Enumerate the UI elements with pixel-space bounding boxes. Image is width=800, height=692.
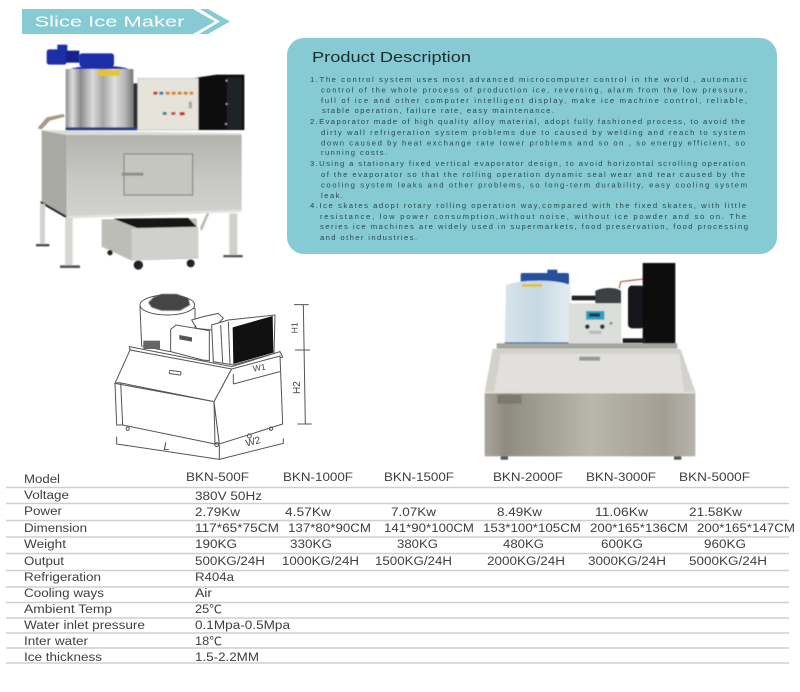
row: Ambient Temp: Ambient Temp <box>24 604 112 616</box>
row: Ice thickness: 1.5-2.2MM <box>195 652 259 664</box>
row: Cooling ways: Cooling ways <box>24 588 104 600</box>
row: Power <box>24 506 743 519</box>
description text: numbered feature list: series ice machines are widely used in supermarkets, food preservation, food processing <box>320 222 748 231</box>
row: Inter water: 18℃ <box>195 636 223 648</box>
row: Water inlet pressure: Water inlet pressure <box>24 620 145 632</box>
description text: numbered feature list: 1.The control system uses most advanced microcomputer control in the world , automatic <box>310 75 747 84</box>
row: Weight: 480KG <box>503 539 544 551</box>
row: Power: Power <box>24 506 62 518</box>
line drawing: ice maker with dimension marks: L <box>163 441 170 453</box>
description text: numbered feature list <box>310 75 748 242</box>
description text: numbered feature list: control of the whole process of production ice, reversing, alarm from the low pressure, <box>321 86 747 94</box>
description text: numbered feature list: of the evaporator so that the rolling operation dynamic seal wear and tear caused by the <box>321 170 745 179</box>
description text: numbered feature list: running costs. <box>321 148 387 157</box>
row: Model: BKN-500F <box>186 472 249 484</box>
row: Power: 4.57Kw <box>285 507 332 519</box>
row: Dimension: 141*90*100CM <box>384 523 474 535</box>
title banner: Slice Ice Maker <box>22 9 230 34</box>
row: Weight: 960KG <box>704 539 746 551</box>
row: Refrigeration: Refrigeration <box>24 572 101 584</box>
row: Weight: 190KG <box>195 539 237 551</box>
row: Output <box>24 556 767 568</box>
row: Power: 8.49Kw <box>497 507 543 519</box>
description text: numbered feature list: 4.Ice skates adopt rotary rolling operation way,compared with the fixed skates, with little <box>310 201 746 210</box>
row: Voltage: 380V 50Hz <box>195 491 262 503</box>
description text: numbered feature list: dirty wall refrigeration system problems due to caused by welding and reach to system <box>321 128 745 137</box>
row: Weight <box>24 539 746 551</box>
title banner: Slice Ice Maker: Slice Ice Maker <box>34 14 185 30</box>
row: Water inlet pressure <box>24 620 291 632</box>
row: Ice thickness: Ice thickness <box>24 652 102 664</box>
description text: numbered feature list: and other industries. <box>320 233 417 242</box>
row: Voltage: Voltage <box>24 490 69 502</box>
row: Weight: 380KG <box>397 539 438 551</box>
row: Output: 2000KG/24H <box>487 556 565 568</box>
photo: stainless slice ice maker on legs with ice bin <box>36 45 244 270</box>
description text: numbered feature list: leak. <box>321 191 343 200</box>
row: Ambient Temp <box>24 604 223 616</box>
units on top of base <box>140 294 275 365</box>
row: Inter water: Inter water <box>24 636 88 648</box>
table rules <box>6 488 789 663</box>
row: Model <box>24 472 750 486</box>
row: Weight: 330KG <box>290 539 332 551</box>
row: Power: 11.06Kw <box>595 507 649 519</box>
description text: numbered feature list: down caused by heat exchange rate lower problems and so on , so energy efficient, so <box>321 138 745 148</box>
row: Voltage <box>24 490 262 503</box>
row: Dimension: Dimension <box>24 523 87 535</box>
row: Weight: 600KG <box>601 539 643 551</box>
description text: numbered feature list: full of ice and other computer intelligent display, make ice machine control, reliable, <box>321 96 747 105</box>
row: Dimension: 200*165*136CM <box>590 523 688 535</box>
line drawing: ice maker with dimension marks: H1 <box>289 322 299 333</box>
row: Refrigeration <box>24 572 235 584</box>
row: Model: BKN-1500F <box>384 472 454 484</box>
panel: product description <box>287 38 777 254</box>
row: Refrigeration: R404a <box>195 572 235 584</box>
row: Model: Model <box>24 474 60 486</box>
photo: compact flake ice maker on stainless storage bin <box>485 263 695 460</box>
row: Model: BKN-3000F <box>586 472 656 484</box>
heading: Product Description: Product Description <box>312 49 471 66</box>
base: lid, front and side <box>115 347 283 444</box>
row: Inter water <box>24 636 223 648</box>
description text: numbered feature list: cooling system leaks and other problems, so long-term durability, easy cooling system <box>321 180 747 190</box>
row: Dimension: 117*65*75CM <box>195 523 279 535</box>
row: Model: BKN-1000F <box>283 472 353 484</box>
row: Model: BKN-2000F <box>493 472 563 484</box>
row: Output: Output <box>24 556 65 568</box>
description text: numbered feature list: stable operation, failure rate, easy maintenance. <box>322 106 554 115</box>
row: Dimension: 200*165*147CM <box>697 523 795 535</box>
row: Output: 1500KG/24H <box>375 556 452 568</box>
row: Output: 500KG/24H <box>195 556 265 568</box>
row: Water inlet pressure: 0.1Mpa-0.5Mpa <box>195 620 291 632</box>
row: Model: BKN-5000F <box>679 472 750 484</box>
row: Ice thickness <box>24 652 259 664</box>
description text: numbered feature list: 3.Using a stationary fixed vertical evaporator design, to avoid horizontal scrolling operation <box>310 159 745 168</box>
row: Output: 5000KG/24H <box>689 556 767 568</box>
line drawing: ice maker with dimension marks: H2 <box>292 381 303 394</box>
row: Power: 7.07Kw <box>391 507 437 519</box>
description text: numbered feature list: resistance, low power consumption,without noise, without ice powder and so on. The <box>320 212 746 221</box>
row: Cooling ways: Air <box>195 588 212 600</box>
specification table <box>24 472 795 664</box>
row: Weight: Weight <box>24 539 67 551</box>
row: Cooling ways <box>24 588 212 600</box>
row: Output: 3000KG/24H <box>588 556 666 568</box>
row: Dimension: 137*80*90CM <box>288 523 371 535</box>
row: Power: 21.58Kw <box>689 507 743 519</box>
line drawing: ice maker with dimension marks: W1 <box>252 362 267 374</box>
row: Output: 1000KG/24H <box>282 556 359 568</box>
row: Power: 2.79Kw <box>195 507 241 519</box>
row: Dimension <box>24 523 795 535</box>
line drawing: ice maker with dimension marks <box>115 294 312 459</box>
row: Ambient Temp: 25℃ <box>195 604 223 616</box>
description text: numbered feature list: 2.Evaporator made of high quality alloy material, adopt fully fashioned process, to avoid the <box>310 117 745 126</box>
row: Dimension: 153*100*105CM <box>483 523 581 535</box>
line drawing: ice maker with dimension marks: W2 <box>245 435 262 450</box>
